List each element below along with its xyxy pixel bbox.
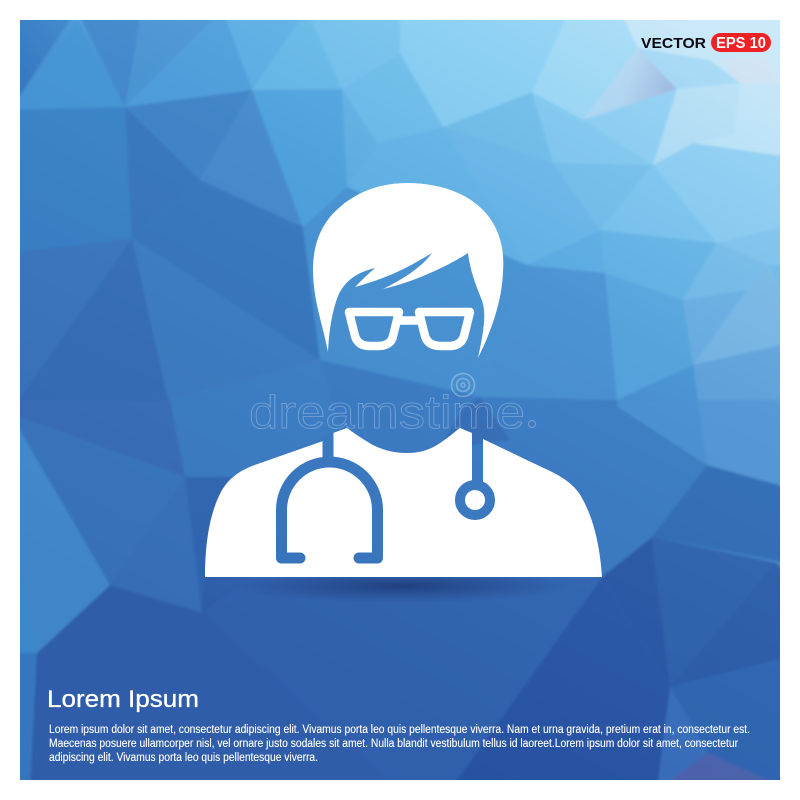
watermark: dreamstime <box>249 386 525 438</box>
shadow under figure <box>232 569 572 603</box>
badge: vector eps 10 <box>641 33 771 52</box>
badge: vector eps 10: EPS 10 <box>716 35 766 52</box>
watermark <box>249 374 536 438</box>
text block: adipiscing elit. Vivamus porta leo quis pellentesque viverra. <box>49 752 318 764</box>
heading: Lorem Ipsum <box>47 686 199 713</box>
body with stethoscope cut-out <box>200 420 610 580</box>
hair <box>313 183 503 358</box>
icon: doctor with glasses and stethoscope <box>200 183 610 580</box>
badge: vector eps 10: VECTOR <box>641 35 706 52</box>
glasses <box>349 312 470 346</box>
text block: Maecenas posuere ullamcorper nisl, vel ornare justo sodales sit amet. Nulla blandit vestibulum tellus id laoreet.Lorem ipsum dolor sit amet, consectetur <box>49 738 738 750</box>
text block <box>49 724 750 764</box>
